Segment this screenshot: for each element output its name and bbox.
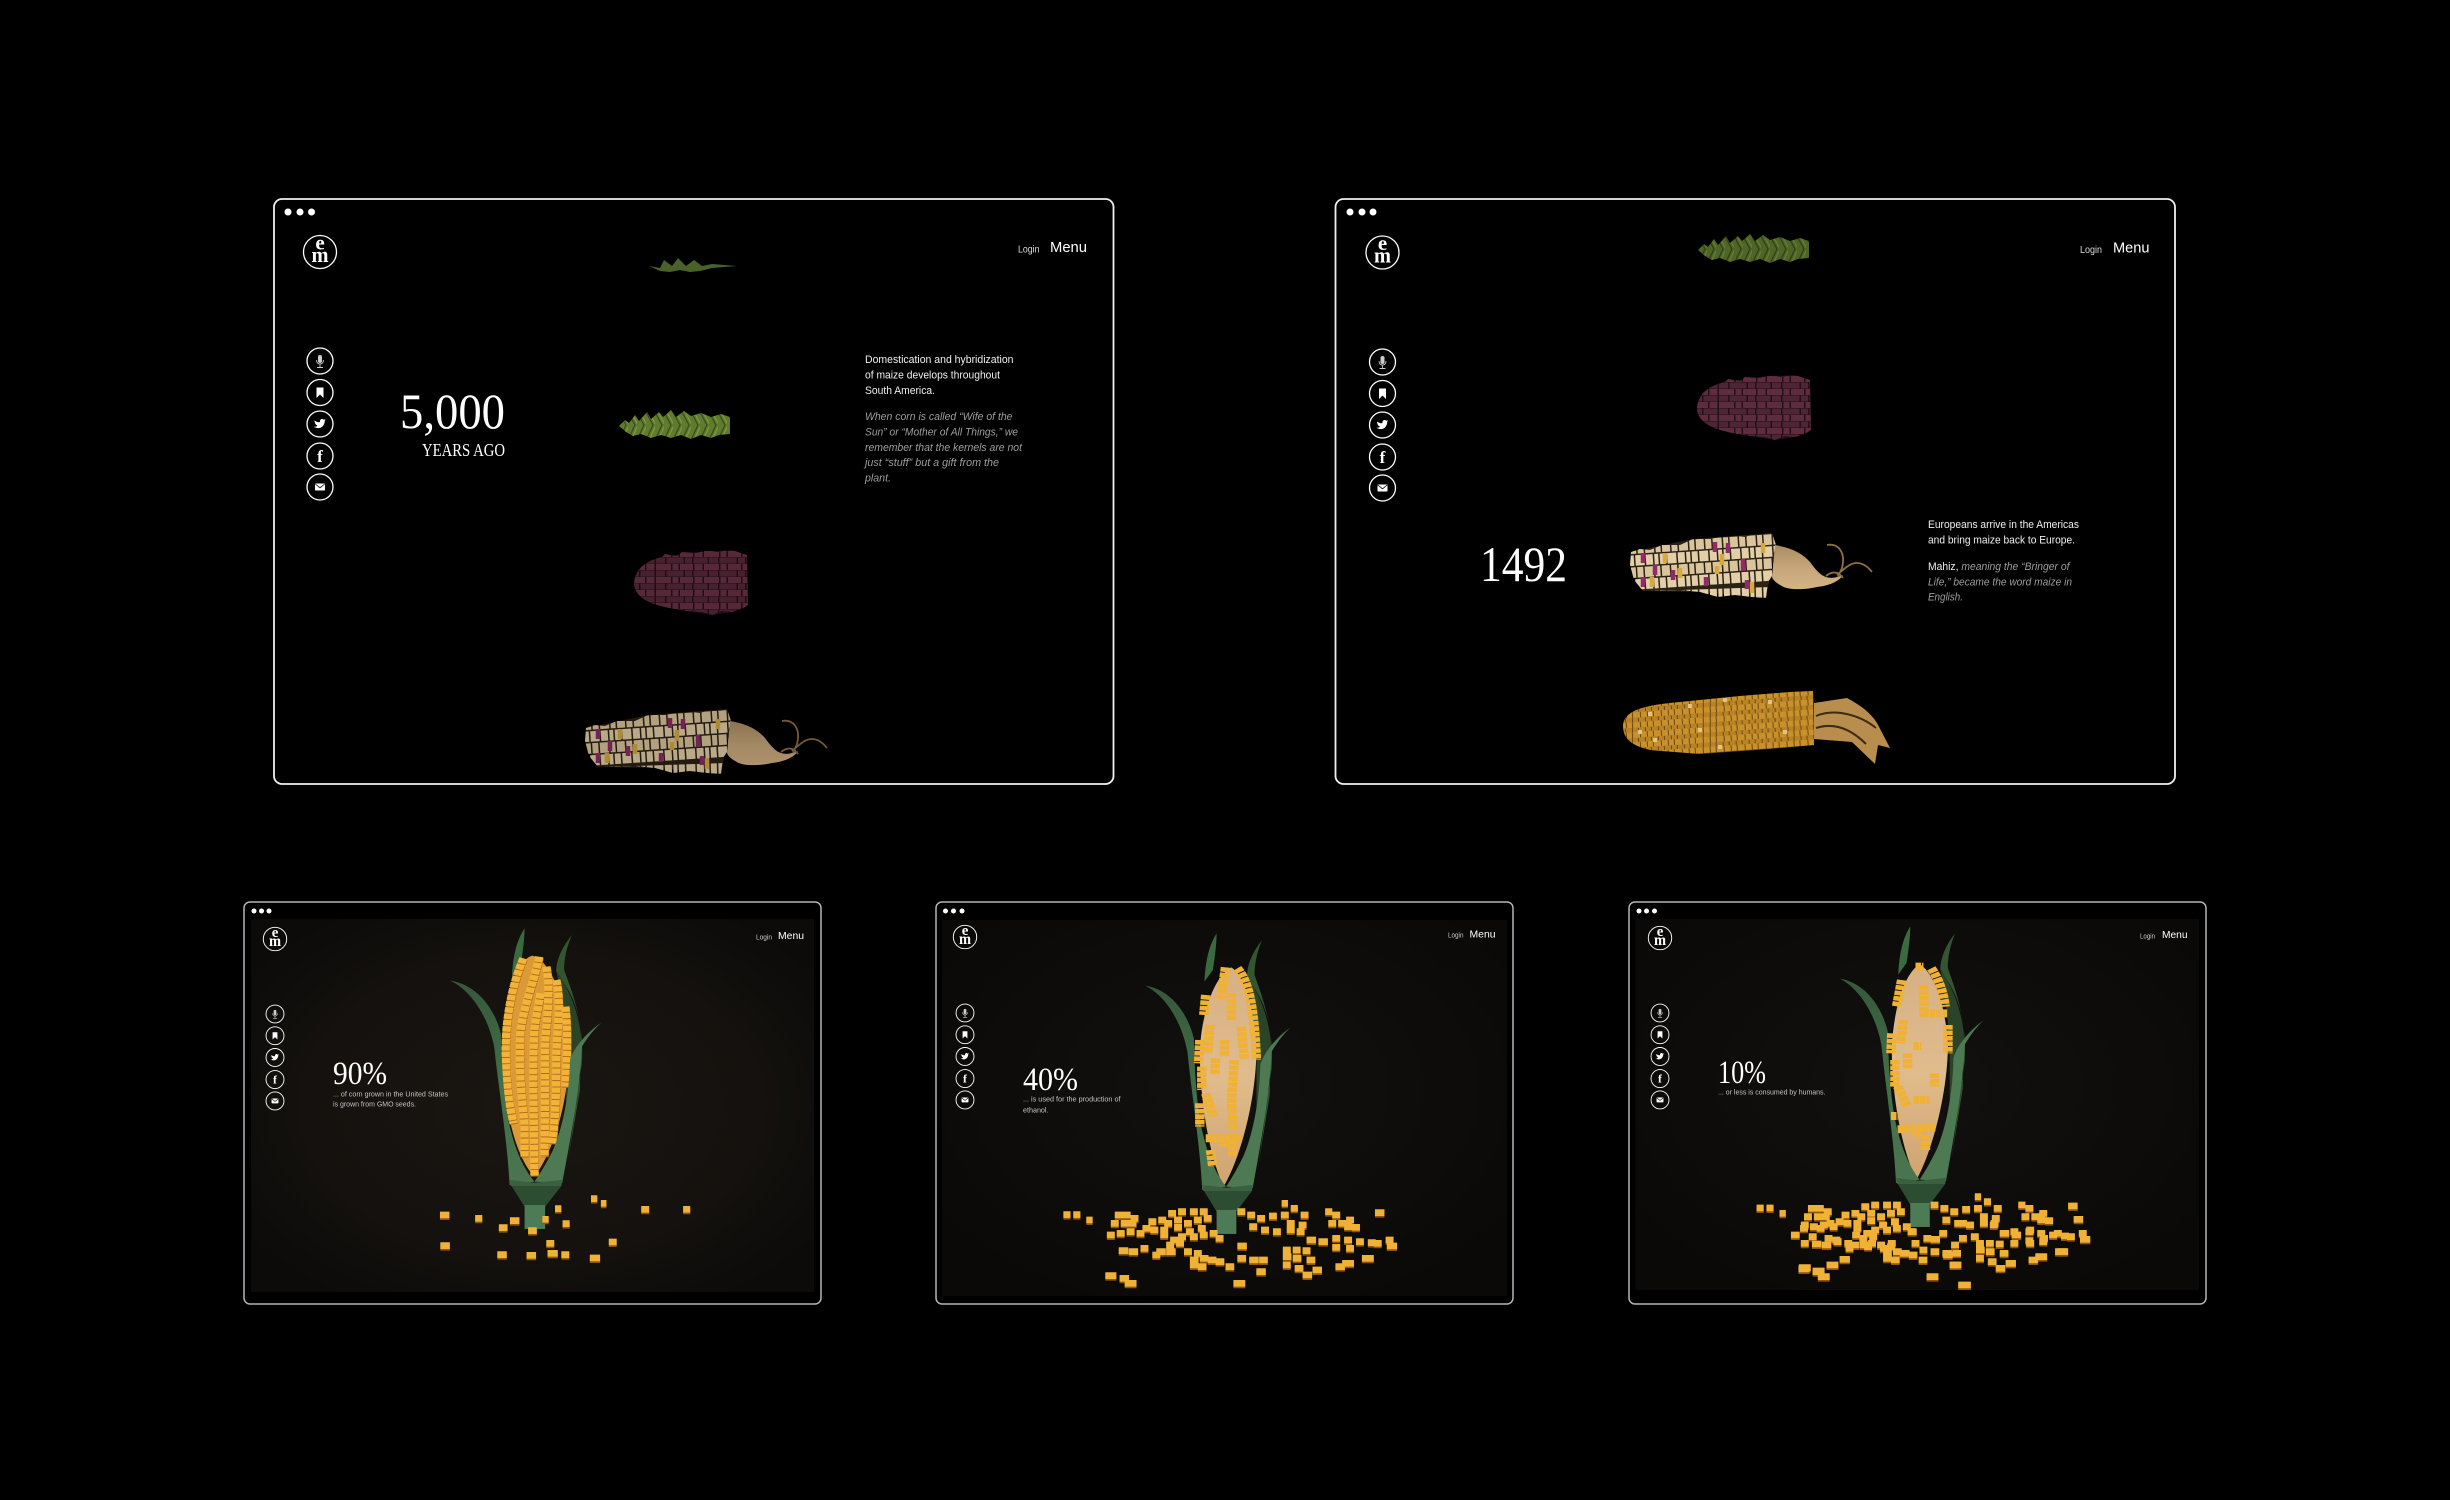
logo [304,230,336,268]
login and menu [2140,929,2188,941]
text: etymology: English. [1928,592,1963,604]
logo: e [962,923,969,939]
statistic caption: ... of corn grown in the United States [333,1092,449,1098]
share icons: f [317,447,323,466]
panel frame [244,902,821,1304]
text: etymology: Life,” became the word maize in [1928,576,2072,588]
login and menu [1448,928,1496,940]
login and menu: Menu [2113,240,2150,256]
logo: m [1654,932,1666,949]
text: quote: When corn is called “Wife of the [865,411,1012,423]
yellow cob [1620,691,1890,764]
login and menu: Menu [778,930,804,942]
date heading: 5,000 [400,383,505,439]
text: fact: South America. [865,385,935,397]
login and menu: Login [1018,244,1040,256]
panel frame [936,902,1513,1304]
statistic caption: ethanol. [1023,1108,1049,1114]
share icons: f [1658,1073,1663,1086]
window dots [943,908,964,914]
photo background [1636,919,2199,1290]
window dots [252,908,272,914]
text: fact: Domestication and hybridization [865,354,1014,366]
text: quote [863,411,1023,484]
share icons: f [1380,448,1386,467]
logo [953,923,977,949]
corn illustration [1757,926,2090,1287]
statistic caption: ... is used for the production of [1023,1096,1121,1104]
text: fact: of maize develops throughout [865,370,1000,382]
logo: m [1374,242,1391,268]
text: fact: Europeans arrive in the Americas [1928,519,2079,531]
teosinte cob [619,410,730,439]
logo [1366,231,1399,269]
statistic caption [333,1092,449,1108]
logo: e [315,230,325,254]
window dots [284,208,315,216]
multicolour cob [1628,533,1872,598]
purple cob [632,550,749,615]
text: quote: remember that the kernels are not [865,442,1023,454]
logo: e [1657,924,1664,940]
login and menu: Login [2080,245,2102,256]
login and menu: Login [1448,932,1464,940]
logo: m [959,931,971,948]
share icons [266,1005,284,1110]
text: fact [1928,519,2079,546]
logo: m [312,242,328,267]
multicolour cob [583,709,827,774]
statistic: 40% [1023,1062,1078,1098]
login and menu: Menu [1470,928,1496,940]
panel frame [1336,199,2175,784]
share icons: f [963,1073,968,1086]
teosinte cob [1698,234,1809,263]
statistic: 90% [333,1056,387,1092]
text: etymology: Mahiz, meaning the “Bringer of [1928,561,2070,573]
share icons [307,348,333,500]
login and menu: Login [2140,934,2155,940]
panel: 10% consumed screen [1629,902,2206,1304]
window dots [1636,908,1657,914]
login and menu [1018,239,1087,256]
text: fact: and bring maize back to Europe. [1928,534,2075,546]
panel: 5,000 years ago browser screen [274,199,1114,784]
date heading: 1492 [1480,536,1567,592]
panel: 90% GMO screen [244,902,821,1304]
panel frame [1629,902,2206,1304]
text: quote: Sun” or “Mother of All Things,” we [865,426,1018,438]
purple cob [1695,375,1812,440]
corn illustration [1063,933,1397,1285]
window dots [1346,208,1376,216]
share icons: f [273,1074,278,1087]
logo: m [269,933,281,950]
login and menu: Menu [1050,239,1087,256]
photo background [942,920,1507,1296]
statistic caption: is grown from GMO seeds. [333,1102,416,1108]
statistic caption [1023,1096,1121,1114]
text: quote: plant. [864,472,891,484]
logo: e [272,925,279,941]
text: etymology [1928,561,2072,604]
panel: 40% ethanol screen [936,902,1513,1304]
share icons [1370,349,1396,501]
login and menu [2080,240,2150,256]
text: quote: just “stuff” but a gift from the [863,457,999,469]
share icons [1651,1004,1669,1109]
photo background [251,919,814,1292]
statistic caption: ... or less is consumed by humans. [1718,1090,1826,1096]
statistic: 10% [1718,1055,1766,1091]
share icons [956,1004,974,1109]
small sprout [649,258,737,272]
logo [1648,924,1672,950]
text: fact [865,354,1014,397]
panel: 1492 browser screen [1336,199,2175,784]
login and menu [756,930,804,942]
panel frame [274,199,1114,784]
logo [263,925,287,951]
corn illustration [440,928,690,1260]
logo: e [1378,231,1387,255]
date subheading: YEARS AGO [422,440,505,460]
login and menu: Login [756,934,772,942]
login and menu: Menu [2162,929,2188,941]
